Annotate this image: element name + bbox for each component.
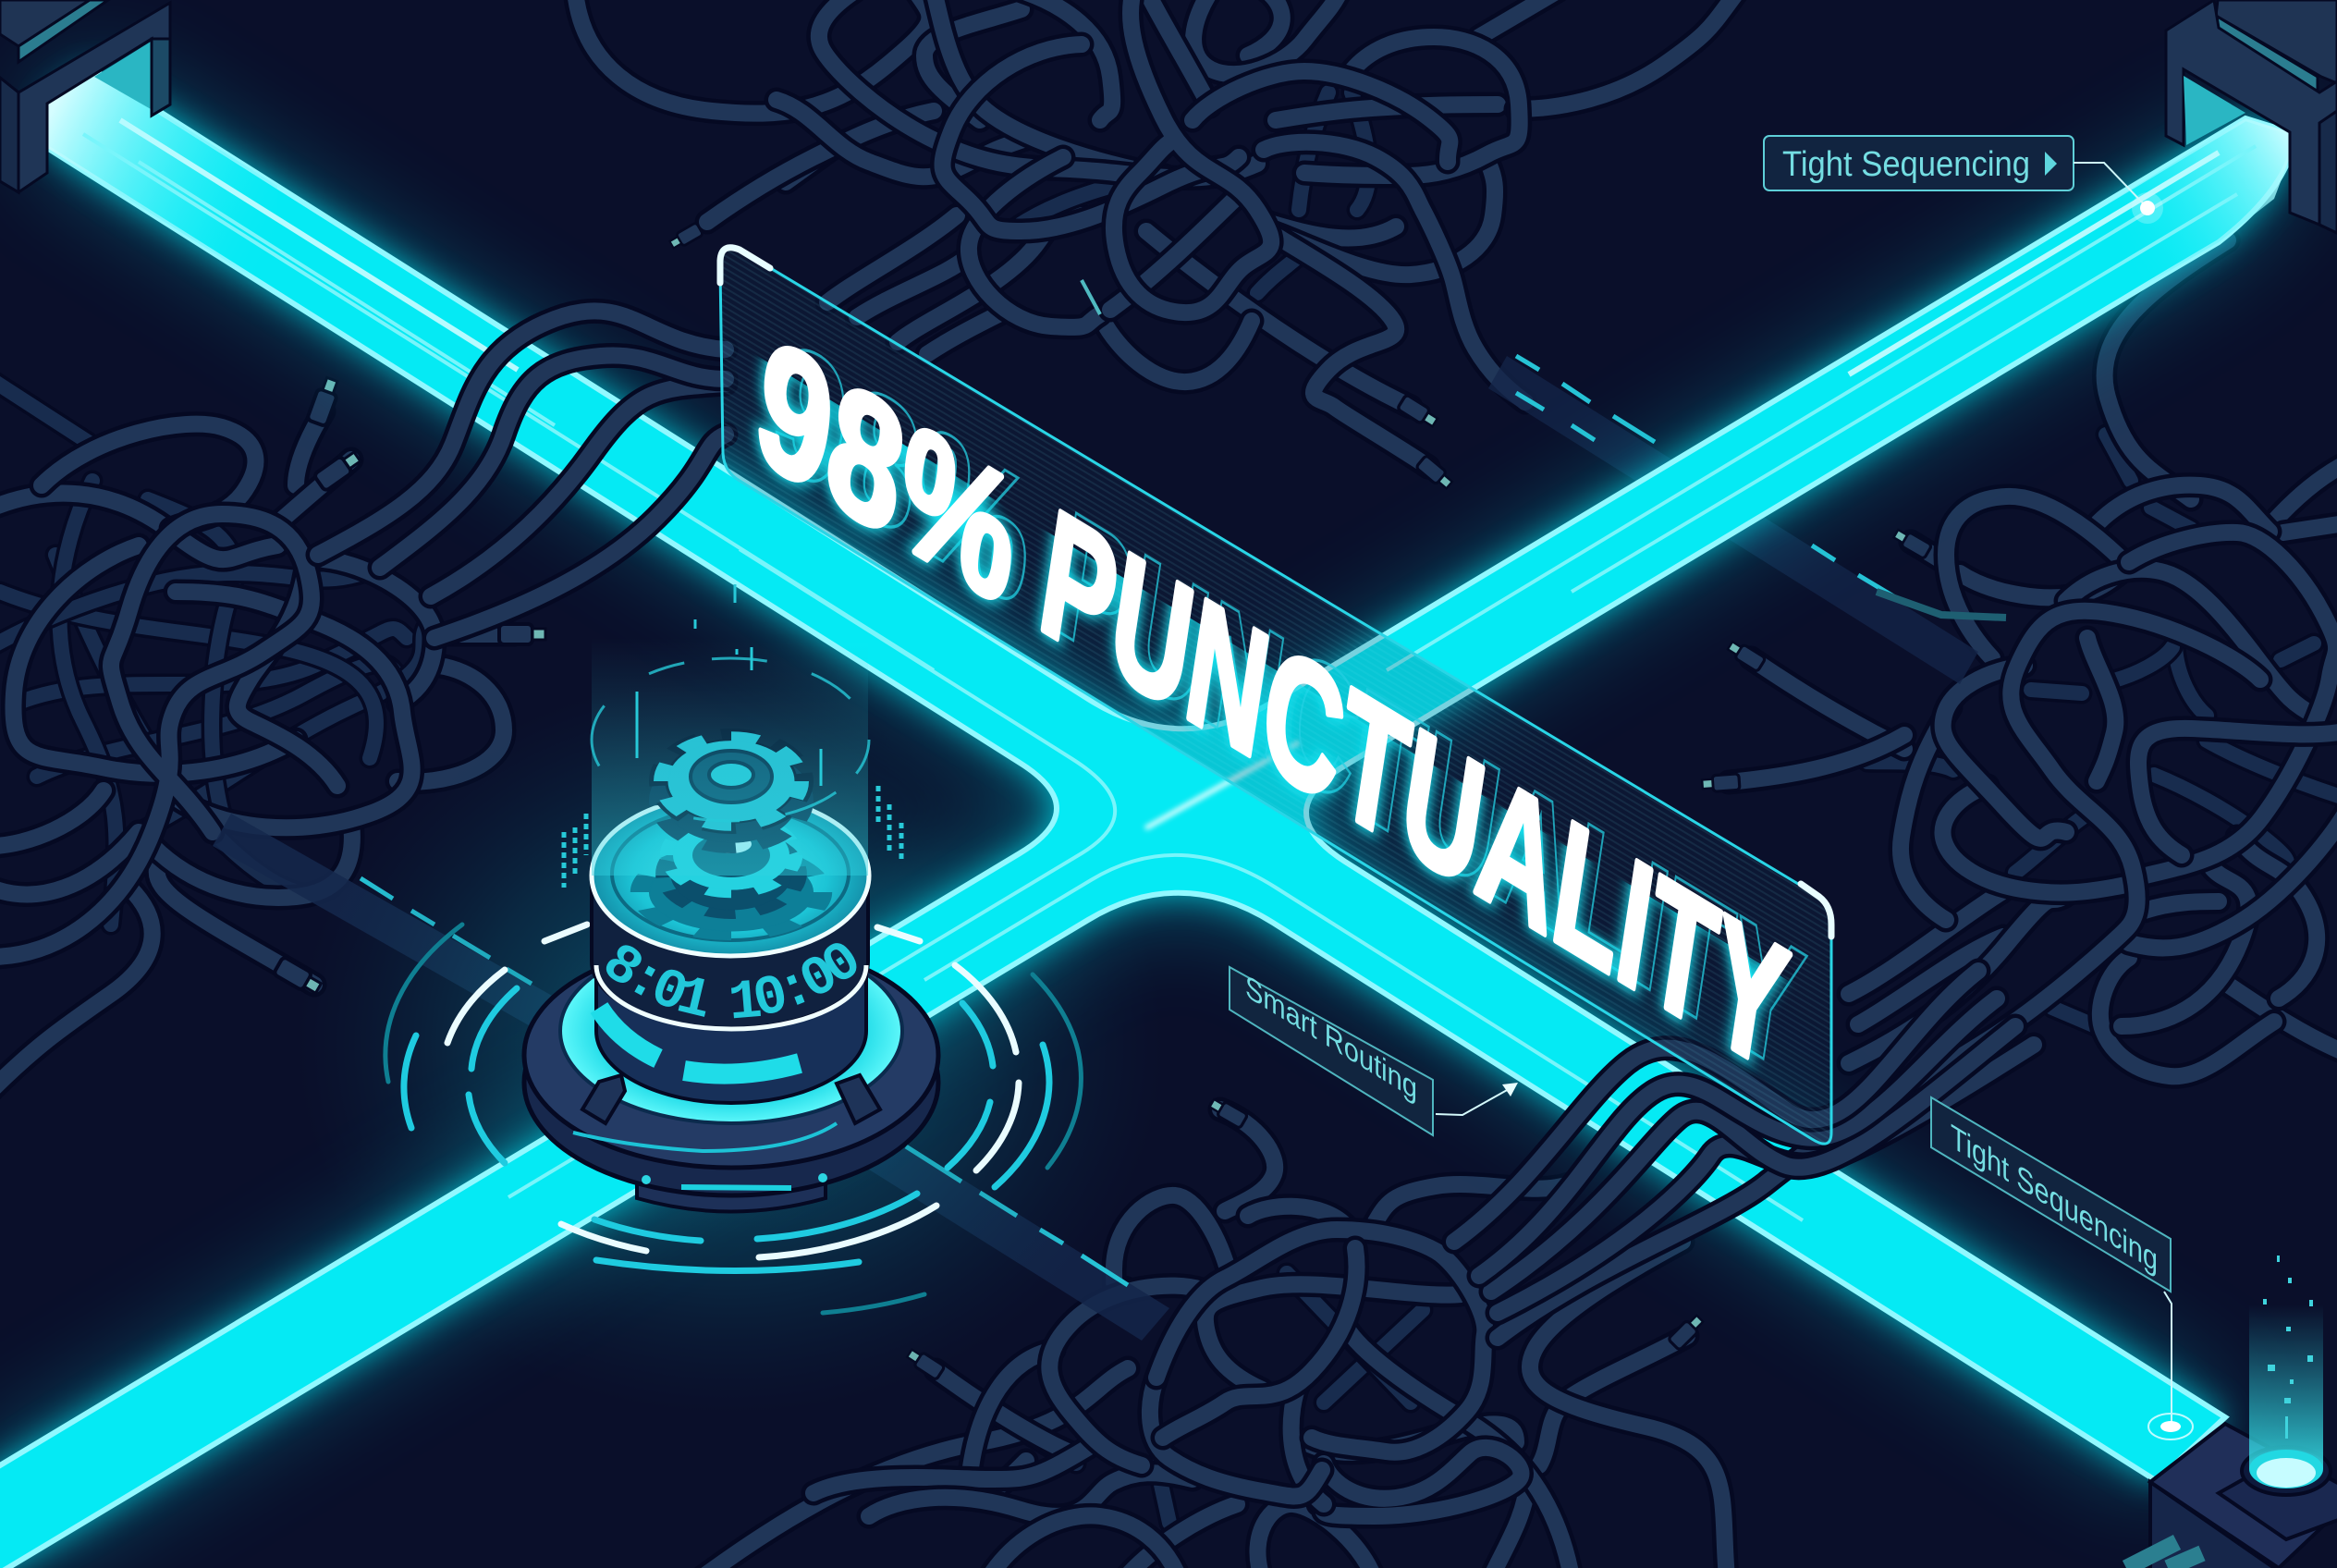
timing rings	[385, 925, 1081, 1313]
cable tangle: top	[575, 0, 1738, 491]
white rim lines	[596, 965, 866, 1029]
panel corner brackets	[720, 248, 1831, 937]
glowing well	[560, 938, 902, 1123]
gateway box: top-left	[0, 0, 170, 192]
gateway box: bottom-right	[2126, 1256, 2337, 1568]
clock digits path	[597, 967, 863, 1018]
title: 98% PUNCTUALITY: PUNCTUALITY	[1046, 472, 1814, 1112]
cable bundle crossing beam, upper left	[318, 311, 726, 638]
base lights	[573, 1123, 837, 1188]
base clamps	[582, 1075, 880, 1123]
leader line	[2074, 163, 2147, 208]
title: 98% PUNCTUALITY: PUNCTUALITY	[1030, 471, 1798, 1111]
cable tangle: left	[0, 376, 545, 1091]
cable tangle: right	[1702, 240, 2337, 1109]
lit bars	[599, 1008, 800, 1074]
data fragments	[564, 584, 901, 888]
title: 98% PUNCTUALITY	[745, 291, 1814, 1120]
ghost tracks	[213, 356, 2006, 1341]
clock hub	[521, 584, 941, 1213]
beam end highlights	[47, 70, 277, 293]
large gear	[642, 850, 820, 935]
hub base	[524, 942, 938, 1195]
label: Smart Routing	[1230, 967, 1518, 1135]
clock readout: 8:01 10:00	[606, 943, 856, 1019]
glass column	[592, 638, 868, 876]
mid gear	[667, 817, 796, 913]
anchor dot	[2148, 1414, 2193, 1439]
beam inner lines	[83, 134, 2256, 1220]
arrow	[1436, 1083, 1518, 1115]
cable tangle: bottom	[703, 1096, 1745, 1568]
light particles	[2263, 1256, 2313, 1439]
leader line	[2164, 1292, 2172, 1424]
gateway box: top-right	[2166, 0, 2337, 233]
title: 98% PUNCTUALITY: PUNCTUALITY	[1030, 471, 1798, 1111]
top gear	[661, 736, 801, 846]
anchor dot	[2132, 192, 2163, 224]
label: Smart Routing: Smart Routing	[1245, 967, 1417, 1108]
title panel	[720, 248, 1831, 1144]
drum top	[592, 795, 869, 956]
clock band	[592, 878, 868, 1028]
title: 98% PUNCTUALITY: 98%	[745, 299, 1029, 645]
arrow marker	[2045, 152, 2057, 176]
side pipes	[2126, 1542, 2202, 1568]
label: Tight Sequencing (top right): Tight Sequencing	[1782, 145, 2030, 184]
light column	[2249, 1305, 2323, 1469]
title: 98% PUNCTUALITY: 98%	[761, 300, 1045, 646]
cable bundle crossing beam, lower right	[1454, 971, 2034, 1338]
hub glow	[296, 675, 1165, 1415]
label: Tight Sequencing (top right)	[1764, 136, 2163, 224]
label: Tight Sequencing (lower right)	[1931, 1097, 2193, 1439]
label: Tight Sequencing (lower right): Tight Sequencing	[1951, 1118, 2158, 1280]
lower drum body	[596, 962, 866, 1103]
title: 98% PUNCTUALITY: 98%	[745, 299, 1029, 645]
hub skirt	[637, 1146, 826, 1211]
